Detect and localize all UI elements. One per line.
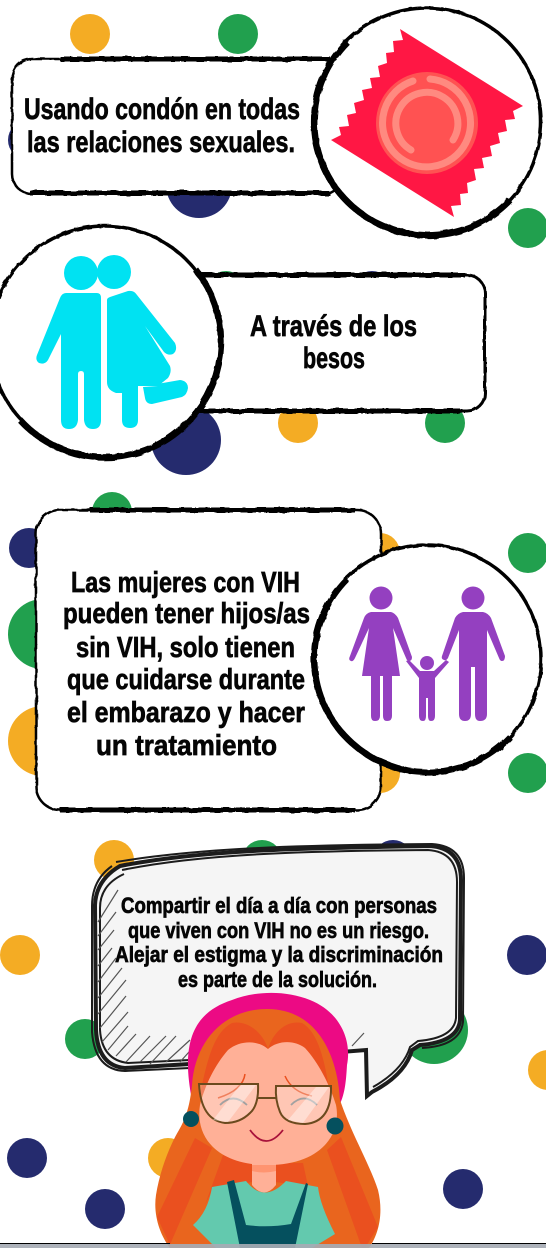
illustration: girl with glasses (155, 993, 380, 1248)
icon: family (349, 586, 505, 721)
text: motherhood: que cuidarse durante (67, 664, 305, 696)
neck (252, 1160, 276, 1192)
eyes (220, 1098, 317, 1105)
bubble shape (92, 844, 464, 1096)
text: condom: las relaciones sexuales. (27, 126, 295, 159)
text: motherhood: sin VIH, solo tienen (76, 632, 295, 664)
text: motherhood: Las mujeres con VIH (71, 567, 300, 599)
icon: condom package (331, 29, 523, 217)
panel: speech bubble (92, 844, 464, 1096)
text: condom (24, 93, 300, 159)
lens highlights (213, 1085, 329, 1123)
text: kisses: besos (303, 342, 365, 375)
circle frame: condom (313, 8, 541, 236)
panel: motherhood (36, 510, 541, 810)
panel: condom (12, 8, 541, 236)
text: condom: Usando condón en todas (24, 93, 300, 126)
circle frame: family (313, 545, 541, 773)
text box: motherhood (36, 510, 381, 810)
text: bubble (115, 893, 443, 992)
text: kisses (250, 310, 417, 375)
text: bubble: es parte de la solución. (178, 967, 377, 992)
text: bubble: Compartir el día a día con personas (121, 893, 437, 918)
overalls (227, 1180, 308, 1248)
text: motherhood: pueden tener hijos/as (63, 598, 310, 630)
bottom strip (0, 1243, 546, 1248)
text: motherhood: un tratamiento (96, 730, 277, 762)
hat (188, 993, 348, 1108)
face (199, 1042, 337, 1165)
hatching (98, 890, 364, 1064)
eyebrows (218, 1074, 312, 1098)
smile (250, 1130, 283, 1141)
text: kisses: A través de los (250, 310, 417, 343)
text: motherhood (63, 567, 310, 762)
icon: kissing couple (36, 255, 188, 429)
hair (155, 1009, 380, 1248)
text box: kisses (170, 275, 485, 411)
glasses (199, 1084, 331, 1124)
text: bubble: Alejar el estigma y la discriminación (115, 942, 443, 967)
text box: condom (12, 59, 342, 194)
earrings (183, 1111, 344, 1134)
circle frame: kisses (0, 226, 221, 458)
text: motherhood: el embarazo y hacer (67, 697, 305, 729)
shirt (193, 1181, 335, 1248)
text: bubble: que viven con VIH no es un riesgo. (128, 918, 429, 943)
panel: kisses (0, 226, 485, 458)
